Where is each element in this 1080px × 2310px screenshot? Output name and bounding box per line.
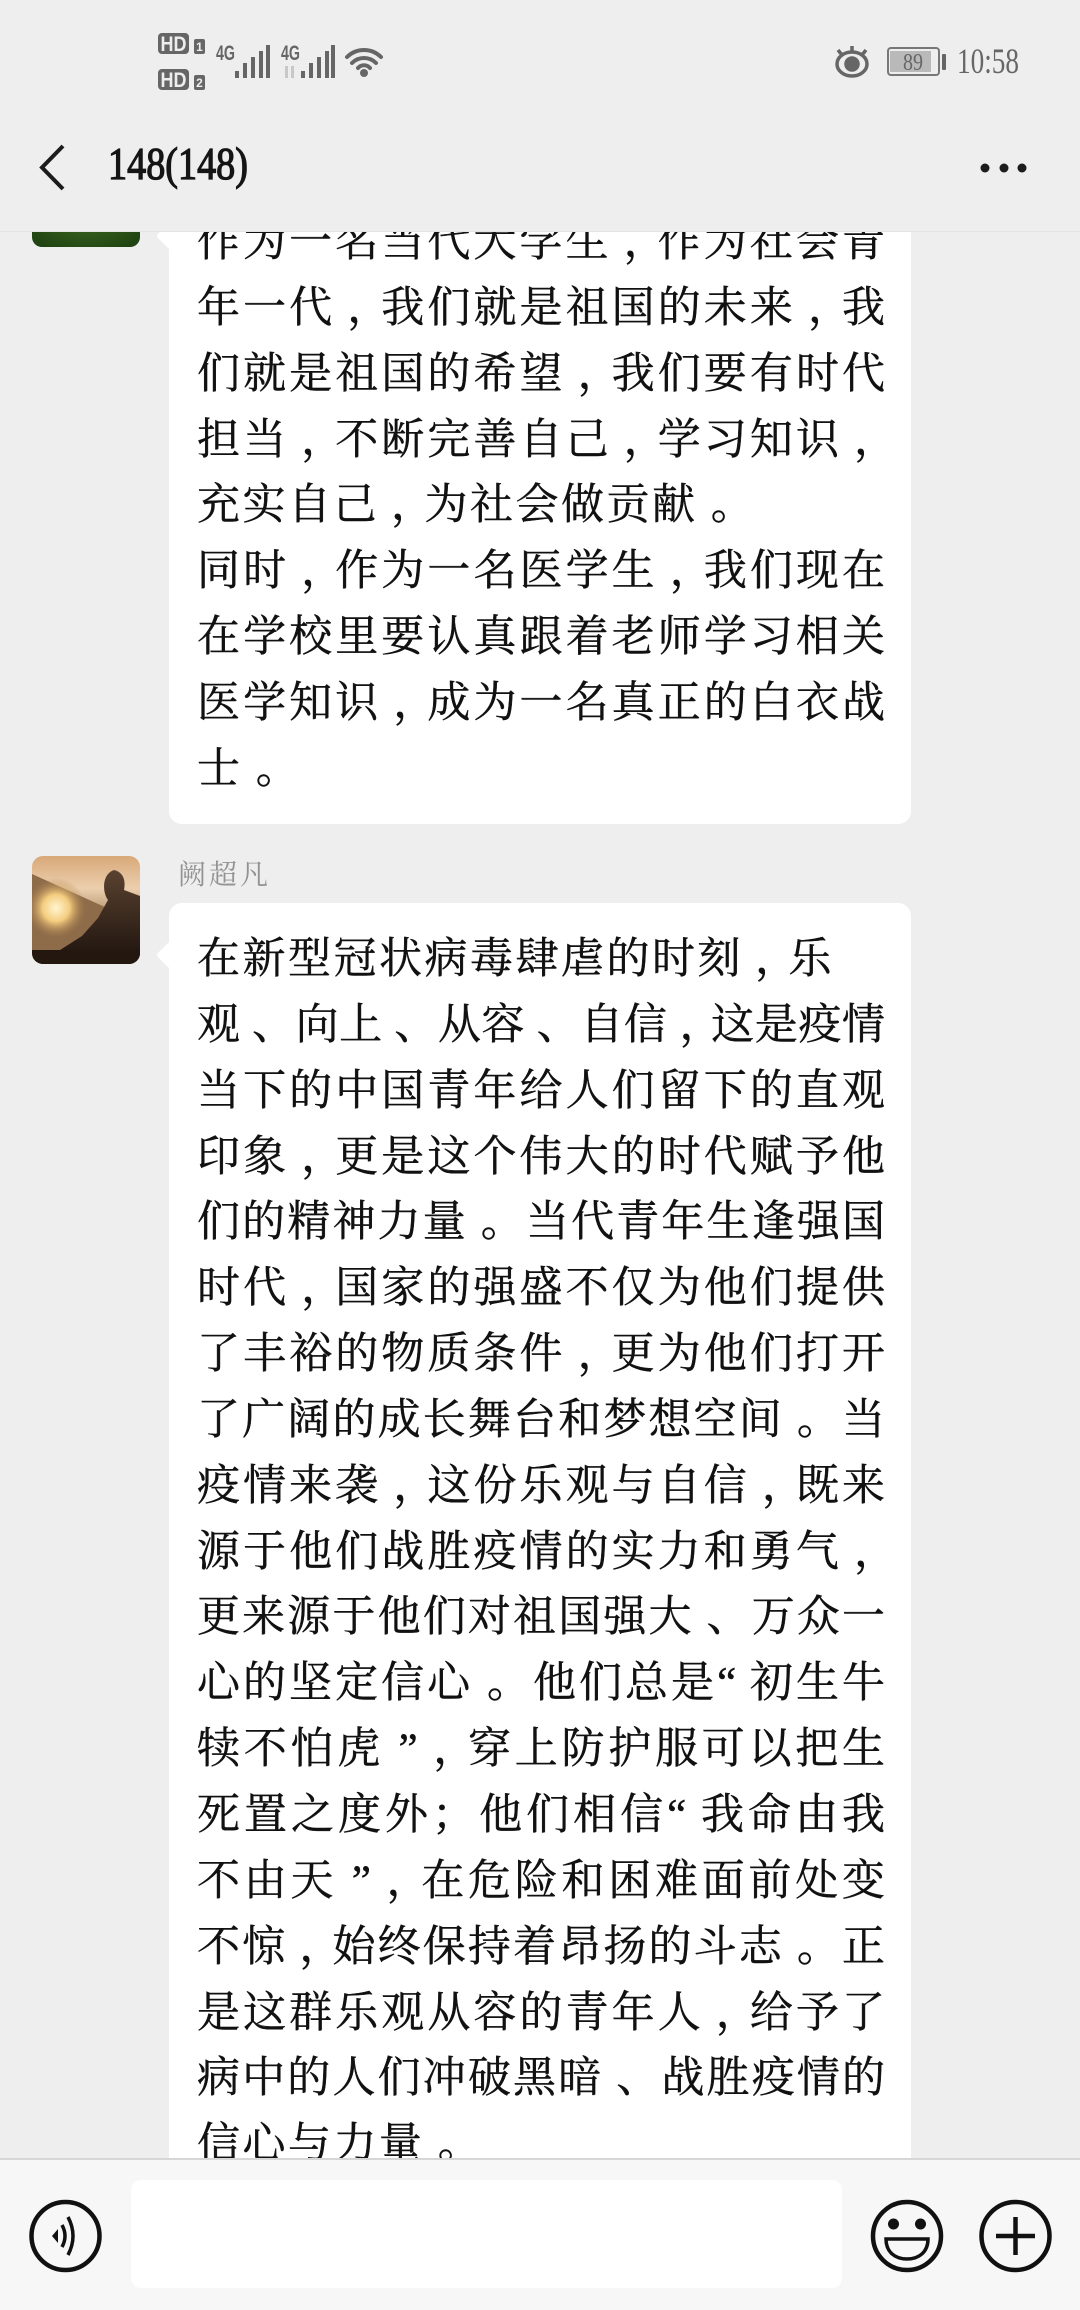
icon: more menu dots — [980, 164, 1026, 172]
sender name: 阙超凡 — [178, 860, 271, 891]
status bar left icons: 4G — [216, 42, 235, 65]
message 2 text: 印象 ，更是这个伟大的时代赋予他 — [197, 1134, 885, 1181]
message 2 text: 犊不怕虎 ” ，穿上防护服可以把生 — [197, 1726, 885, 1773]
status bar left icons: 2 — [196, 76, 203, 90]
message 1 text: 士 。 — [197, 746, 301, 793]
avatar: green grass (cropped) — [32, 192, 140, 247]
bubble 1 tail — [156, 222, 184, 250]
message 2 text: 不惊 ，始终保持着昂扬的斗志 。正 — [197, 1924, 885, 1971]
message 2 text: 时代 ，国家的强盛不仅为他们提供 — [197, 1265, 885, 1312]
message 2 text: 观 、向上 、从容 、自信 ，这是疫情 — [197, 1002, 885, 1049]
message 2 text — [197, 936, 897, 2158]
message bubble 1 — [169, 192, 911, 824]
message 1 text: 充实自己 ，为社会做贡献 。 — [197, 482, 756, 529]
status bar left icons: HD — [160, 33, 186, 56]
message 1 text: 在学校里要认真跟着老师学习相关 — [197, 614, 885, 661]
icon: back chevron — [39, 144, 64, 190]
status bar left icons: 4G — [281, 42, 300, 65]
status bar right icons and clock — [835, 41, 1019, 81]
message 1 text: 医学知识 ，成为一名真正的白衣战 — [197, 680, 885, 727]
eye icon — [837, 46, 867, 76]
message 2 text: 不由天 ” ，在危险和困难面前处变 — [197, 1858, 885, 1905]
message 2 text: 源于他们战胜疫情的实力和勇气 ， — [197, 1529, 897, 1576]
message 2 text: 更来源于他们对祖国强大 、万众一 — [197, 1594, 885, 1641]
message bubble 2 — [169, 903, 911, 2203]
message 1 text — [197, 232, 897, 793]
message 2 text: 心的坚定信心 。他们总是“ 初生牛 — [197, 1660, 885, 1707]
avatar: silhouette at sunset — [32, 856, 140, 964]
message 2 text: 疫情来袭 ，这份乐观与自信 ，既来 — [197, 1463, 885, 1510]
message 1 text: 担当 ，不断完善自己 ，学习知识 ， — [197, 417, 897, 464]
top header bar — [0, 0, 1080, 232]
message 2 text: 病中的人们冲破黑暗 、战胜疫情的 — [197, 2055, 885, 2102]
message 2 text: 当下的中国青年给人们留下的直观 — [197, 1068, 885, 1115]
message 2 text: 是这群乐观从容的青年人 ，给予了 — [197, 1990, 885, 2036]
icon: voice — [29, 2200, 102, 2272]
text input field — [131, 2180, 842, 2288]
icon: smiley — [870, 2200, 944, 2272]
message 1 text: 们就是祖国的希望 ，我们要有时代 — [197, 351, 885, 398]
chat scroll area — [32, 232, 911, 2158]
icon: plus — [979, 2200, 1052, 2272]
status bar left icons: HD — [160, 69, 186, 92]
status bar left icons — [158, 33, 384, 92]
message 2 text: 在新型冠状病毒肆虐的时刻 ，乐 — [197, 936, 834, 983]
message 2 text: 了广阔的成长舞台和梦想空间 。当 — [197, 1397, 885, 1444]
bubble 2 tail — [156, 941, 184, 969]
message 1 text: 同时 ，作为一名医学生 ，我们现在 — [197, 548, 885, 595]
battery icon: 89 — [903, 50, 923, 76]
message 2 text: 了丰裕的物质条件 ，更为他们打开 — [197, 1331, 885, 1378]
status bar left icons: 1 — [196, 40, 203, 54]
message 2 text: 死置之度外；他们相信“ 我命由我 — [197, 1792, 885, 1839]
battery icon — [888, 48, 946, 76]
bottom input bar — [0, 2158, 1080, 2310]
message 1 text: 年一代 ，我们就是祖国的未来 ，我 — [197, 285, 885, 332]
message 2 text: 们的精神力量 。当代青年生逢强国 — [197, 1199, 885, 1246]
